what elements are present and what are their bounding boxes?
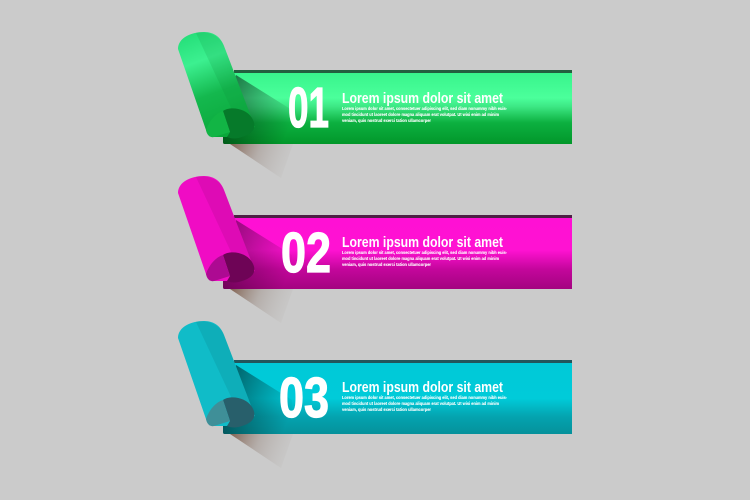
- curl 02 inner flap: [206, 255, 230, 281]
- body text 01: Lorem ipsum dolor sit amet, consectetuer adipiscing elit, sed diam nonummy nibh euis-: [342, 106, 507, 111]
- banner 03 top edge: [234, 360, 572, 363]
- body text 02: [342, 250, 507, 267]
- banner 03 inner shadow: [223, 365, 292, 434]
- banner 01 inner shadow: [223, 75, 292, 144]
- curl 03 roll body: [178, 321, 255, 426]
- banner 02: [178, 176, 572, 323]
- curl 02 roll opening: [223, 252, 254, 282]
- body text 01: mod tincidunt ut laoreet dolore magna aliquam erat volutpat. Ut wisi enim ad minim: [342, 112, 499, 117]
- banner 01 top edge: [234, 70, 572, 73]
- number 01: 01: [288, 76, 329, 140]
- body text 01: [342, 106, 507, 123]
- body text 02: Lorem ipsum dolor sit amet, consectetuer adipiscing elit, sed diam nonummy nibh euis-: [342, 250, 507, 255]
- banner 03: [178, 321, 572, 468]
- curl 01: [178, 32, 255, 138]
- number 03: 03: [279, 366, 329, 430]
- curl 03 roll opening: [223, 397, 254, 428]
- cast shadow below banner 03: [230, 434, 293, 468]
- body text 02: mod tincidunt ut laoreet dolore magna aliquam erat volutpat. Ut wisi enim ad minim: [342, 256, 499, 261]
- banner 02 inner shadow: [223, 220, 292, 289]
- body text 03: veniam, quis nostrud exerci tation ullamcorper: [342, 407, 431, 412]
- curl 03 inner flap: [206, 400, 230, 426]
- curl 02 roll body: [178, 176, 255, 281]
- body text 03: mod tincidunt ut laoreet dolore magna aliquam erat volutpat. Ut wisi enim ad minim: [342, 401, 499, 406]
- body text 03: [342, 395, 507, 412]
- body text 02: veniam, quis nostrud exerci tation ullamcorper: [342, 262, 431, 267]
- banner 02 ribbon: [223, 218, 572, 289]
- heading 03: Lorem ipsum dolor sit amet: [342, 379, 503, 396]
- body text 03: Lorem ipsum dolor sit amet, consectetuer adipiscing elit, sed diam nonummy nibh euis-: [342, 395, 507, 400]
- curl 03: [178, 321, 255, 428]
- banner 03 ribbon: [223, 363, 572, 434]
- banner 01: [178, 32, 572, 178]
- heading 01: Lorem ipsum dolor sit amet: [342, 90, 503, 107]
- banner 01 ribbon: [223, 73, 572, 144]
- curl 01 roll opening: [223, 108, 254, 138]
- curl 02: [178, 176, 255, 282]
- number 02: 02: [281, 221, 331, 285]
- heading 02: Lorem ipsum dolor sit amet: [342, 234, 503, 251]
- cast shadow below banner 02: [230, 289, 293, 323]
- curl 01 inner flap: [206, 111, 230, 137]
- banner 02 top edge: [234, 215, 572, 218]
- body text 01: veniam, quis nostrud exerci tation ullamcorper: [342, 118, 431, 123]
- cast shadow below banner 01: [230, 144, 293, 178]
- curl 01 roll body: [178, 32, 255, 137]
